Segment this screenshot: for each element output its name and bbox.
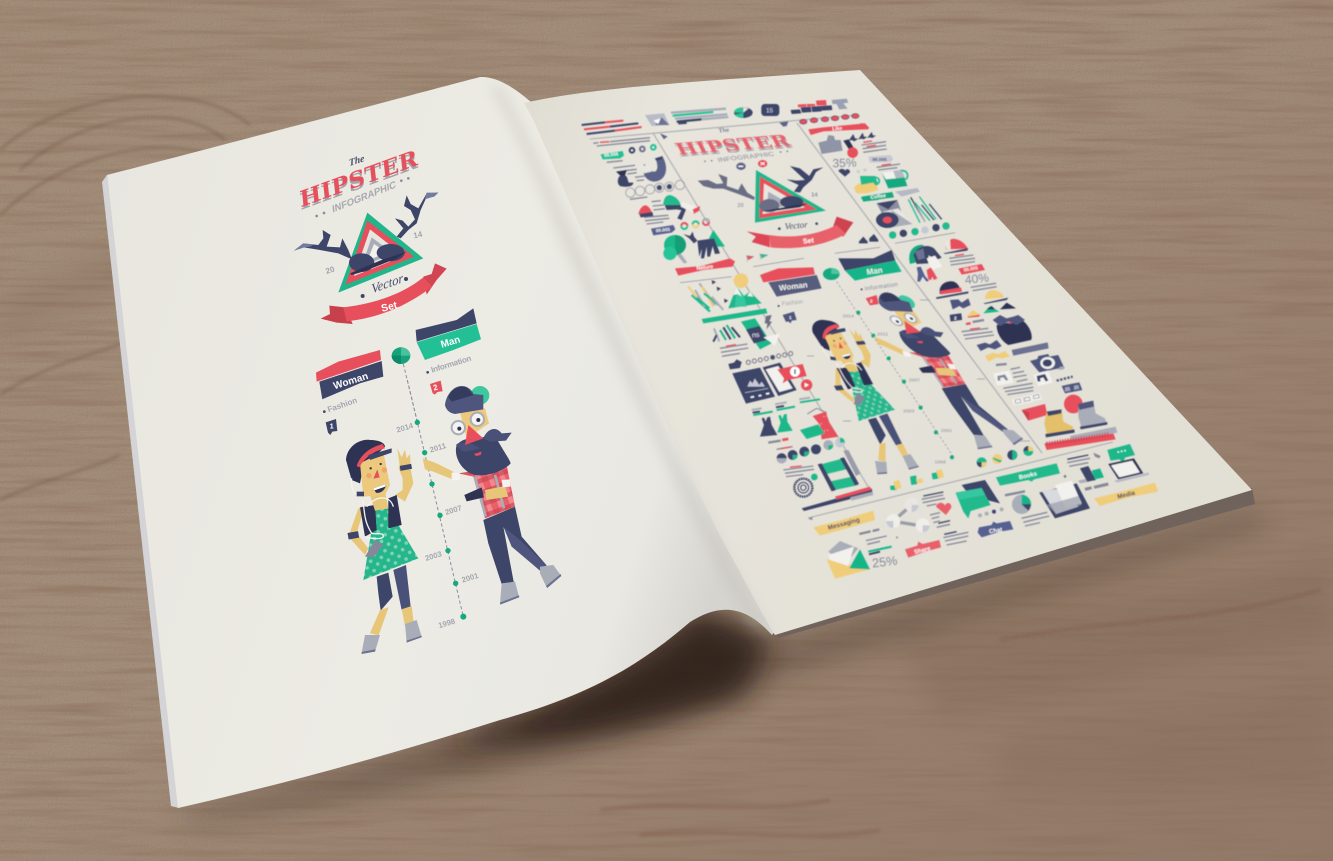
tag: 1 (right page): 1 bbox=[789, 315, 792, 320]
banner: Nature bbox=[675, 258, 735, 276]
tag: 2 (right page): 2 bbox=[870, 298, 873, 303]
pies row bbox=[777, 438, 845, 463]
icon: triangle badge bbox=[338, 213, 423, 293]
icon: antlers bbox=[294, 193, 438, 259]
lines and bar bbox=[859, 529, 892, 554]
label: Fashion: Fashion bbox=[326, 396, 358, 414]
section: right column top bbox=[860, 123, 975, 299]
tag: 2 (right page) bbox=[866, 295, 879, 305]
plus sign: + bbox=[1063, 474, 1067, 480]
figure: woman (right page) bbox=[807, 318, 923, 479]
icon: red box and disc bbox=[1022, 395, 1083, 421]
stat: 35%: 35% bbox=[832, 155, 857, 170]
timeline balloon bbox=[392, 347, 410, 364]
strip: comb bars bbox=[1012, 342, 1049, 356]
icon: red bubble clock bbox=[777, 364, 807, 383]
icon: sun bbox=[734, 273, 748, 288]
right page sheet bbox=[524, 70, 1252, 635]
title: HIPSTER: HIPSTER bbox=[298, 147, 420, 216]
arrow lines above labels bbox=[753, 247, 880, 267]
multicolor rings bbox=[681, 219, 709, 229]
icons: people bbox=[859, 234, 878, 243]
icon: triangle badge (right page) bbox=[755, 170, 826, 223]
icon: thermometer bbox=[843, 139, 858, 158]
banner: Share bbox=[905, 540, 941, 558]
years 20 and 14 (right page): 20 bbox=[737, 203, 744, 209]
icon: cursor arrow bbox=[660, 133, 668, 139]
icon: navy shirt with bow tie bbox=[993, 315, 1032, 345]
icons: man and woman bbox=[917, 267, 937, 282]
section: bottom media row bbox=[794, 444, 1158, 579]
section: right column bottom bbox=[950, 264, 1117, 467]
icon: magnets bbox=[607, 156, 666, 187]
gutter shading bbox=[490, 85, 772, 632]
grid divider lines bbox=[590, 115, 1113, 518]
subtitle: INFOGRAPHIC (right page) bbox=[704, 150, 788, 164]
green banner fragment bbox=[861, 195, 878, 201]
panel: right page infographic bbox=[582, 99, 1158, 579]
paragraph lines bbox=[593, 138, 650, 146]
title: HIPSTER (right page) bbox=[672, 132, 796, 161]
stars row bbox=[849, 132, 876, 141]
lines bbox=[720, 344, 748, 356]
section: top row and left column bbox=[582, 99, 880, 283]
plus mark: × bbox=[896, 535, 899, 540]
stars bbox=[778, 222, 818, 230]
bottom line arrowhead bbox=[808, 517, 812, 520]
banner: Share: Share bbox=[914, 546, 932, 556]
badge: 15: 15 bbox=[766, 108, 773, 115]
banner: Chat bbox=[978, 521, 1013, 537]
bar lines top left bbox=[582, 121, 642, 134]
years 20 and 14 (right page): 14 bbox=[811, 192, 818, 198]
title: The: The bbox=[348, 153, 366, 169]
icon: navy dress bbox=[760, 417, 777, 437]
banner: Man: Man bbox=[440, 335, 462, 351]
icon: trees and deer bbox=[663, 230, 725, 263]
lines bbox=[943, 532, 968, 545]
badge: 00.005 red bbox=[958, 264, 985, 275]
cup steam and yellow snack bbox=[854, 168, 878, 193]
title: HIPSTER (right page): HIPSTER bbox=[673, 134, 796, 161]
timeline: years 1998 to 2014: 1998 bbox=[437, 616, 457, 630]
icon: ladder bbox=[818, 450, 861, 491]
banner: Messaging: Messaging bbox=[827, 517, 861, 532]
white tile icons bbox=[993, 371, 1053, 405]
banner: Media: Media bbox=[1117, 490, 1136, 501]
lines bbox=[1067, 455, 1090, 466]
icon: smart watch bbox=[741, 318, 772, 349]
badge: 00.005 green: 00.005 bbox=[604, 151, 619, 158]
subtitle: INFOGRAPHIC bbox=[315, 177, 410, 217]
stars bbox=[361, 277, 408, 298]
chart: small green bars bbox=[713, 325, 740, 342]
label: Information: Information bbox=[430, 354, 473, 375]
icon: navy heart bbox=[838, 169, 850, 177]
icon: share nodes bbox=[886, 498, 930, 532]
lines bbox=[777, 447, 793, 449]
left page edge stack bbox=[102, 175, 179, 808]
icon: green dress bbox=[777, 414, 793, 433]
icon: yellow pastry bbox=[860, 183, 878, 193]
banner: Coffee: Coffee bbox=[870, 193, 887, 201]
grey tag bbox=[895, 188, 920, 197]
lines bbox=[949, 254, 975, 265]
icon: envelope bbox=[877, 200, 902, 216]
ring row bbox=[626, 180, 685, 197]
icon: smart watch: ΠS bbox=[752, 333, 760, 340]
banner: Nature: Nature bbox=[696, 264, 714, 272]
ribbon: Set (right page): Set bbox=[803, 237, 815, 246]
ribbon: Set (right page) bbox=[747, 217, 853, 248]
timeline (right page): 1998 bbox=[935, 459, 946, 465]
magazine shadow on table bbox=[176, 510, 1265, 822]
icon: lightning bbox=[765, 315, 772, 329]
banner: Coffee bbox=[862, 192, 894, 202]
icon: yellow boot bbox=[1044, 409, 1075, 437]
small paired bars bbox=[890, 469, 944, 490]
small triangles bbox=[712, 280, 728, 303]
red dot row bbox=[800, 114, 859, 124]
timeline (right page) bbox=[837, 282, 954, 465]
lines bbox=[1022, 512, 1049, 526]
column bars bbox=[1078, 466, 1104, 483]
strips: corrugated bbox=[1044, 427, 1117, 450]
icon: green box bbox=[800, 424, 825, 439]
timeline (right page): 2014 bbox=[843, 313, 854, 319]
icon: coat bbox=[909, 245, 943, 270]
figure: woman bbox=[346, 440, 422, 654]
banner: Media bbox=[1094, 483, 1158, 506]
ribbon: Set bbox=[321, 263, 447, 324]
timeline: years 1998 to 2014: 2003 bbox=[424, 549, 443, 563]
chevrons and navy tiles bbox=[1057, 377, 1082, 393]
timeline: years 1998 to 2014: 2001 bbox=[461, 571, 480, 585]
icon: antlers (right page) bbox=[698, 166, 823, 200]
icon: envelope bbox=[827, 541, 870, 579]
paragraph lines bbox=[862, 141, 887, 152]
timeline (right page): 2001 bbox=[941, 428, 952, 434]
years 20 and 14 bbox=[324, 230, 424, 276]
panel: left page header emblem bbox=[294, 145, 481, 422]
icon: navy bow tie bbox=[950, 298, 971, 309]
stat: 25%: 25% bbox=[871, 554, 898, 571]
green dot bbox=[811, 474, 818, 480]
timeline (right page): 2011 bbox=[877, 332, 888, 338]
strip: green wave bbox=[702, 308, 767, 323]
years 20 and 14: 14 bbox=[413, 230, 424, 240]
dots row bbox=[978, 507, 1004, 517]
badge: 00.005 grey bbox=[868, 155, 893, 163]
wifi icon bbox=[1093, 453, 1101, 458]
icon: heart bbox=[936, 503, 951, 515]
lines bbox=[1003, 367, 1033, 395]
banner: Like: Like bbox=[832, 126, 843, 132]
title: The (right page): The bbox=[717, 127, 731, 134]
icon: folded tile bbox=[645, 113, 669, 126]
banner: Messaging bbox=[813, 511, 875, 536]
label: Information (right page): Information bbox=[864, 282, 898, 293]
figure: man bbox=[423, 386, 561, 605]
subtitle: INFOGRAPHIC (right page): INFOGRAPHIC bbox=[717, 151, 776, 164]
magazine bottom page block edge bbox=[770, 488, 1255, 638]
grey dash bbox=[996, 360, 1007, 368]
badge: 00.005 grey: 00.005 bbox=[872, 157, 887, 162]
tag: 1: 1 bbox=[330, 422, 334, 431]
icon: laptop bbox=[1108, 458, 1149, 483]
banner: Like bbox=[808, 123, 869, 135]
icon: chat bubbles bbox=[956, 480, 1000, 518]
left page sheet bbox=[107, 77, 800, 808]
icon: yellow hat bbox=[983, 290, 1008, 304]
label bars bbox=[966, 320, 971, 327]
icon: navy hat small bbox=[728, 359, 742, 369]
badge: 00.005 green bbox=[601, 151, 624, 159]
timeline (right page): 2003 bbox=[903, 409, 915, 415]
timeline: years 1998 to 2014: 2014 bbox=[395, 421, 415, 435]
banner: Books bbox=[996, 463, 1060, 486]
icon: wheel bbox=[794, 479, 812, 497]
panel: left page characters and timeline bbox=[326, 380, 561, 654]
chart: slanted bars bbox=[688, 283, 723, 312]
tag: 2 bbox=[430, 381, 443, 395]
badge: 00.005 navy: 00.005 bbox=[656, 227, 671, 233]
figure: man (right page) bbox=[855, 287, 1031, 459]
lines bbox=[783, 466, 814, 477]
icon: coffee cups bbox=[860, 170, 908, 188]
icon: open book bbox=[1039, 481, 1090, 518]
grey bars bbox=[1085, 484, 1108, 489]
ribbon: Set: Set bbox=[380, 300, 399, 315]
icon: red hat bbox=[943, 239, 968, 254]
man banner (right page) bbox=[838, 250, 902, 281]
small bar groups bbox=[752, 398, 820, 415]
stat: 40%: 40% bbox=[964, 271, 990, 287]
icon: thumbs up bbox=[818, 135, 843, 154]
banner: Man bbox=[416, 308, 481, 360]
lines bbox=[971, 283, 997, 291]
row of small discs bbox=[889, 222, 950, 239]
man banner (right page): Man bbox=[866, 266, 883, 277]
icon: music player tablet bbox=[732, 368, 775, 404]
ring row bbox=[746, 352, 793, 364]
banner: Books: Books bbox=[1018, 471, 1038, 481]
timeline: years 1998 to 2014: 2007 bbox=[444, 503, 463, 517]
lines bbox=[877, 164, 900, 170]
red icon bbox=[860, 123, 869, 129]
stacked bar chart top bbox=[671, 109, 728, 123]
timeline: years 1998 to 2014: 2011 bbox=[429, 441, 448, 455]
column chart with red caps bbox=[791, 100, 832, 114]
section: left column middle bbox=[688, 250, 1031, 479]
stacked strips bbox=[802, 487, 873, 511]
text: Vector: Vector bbox=[371, 270, 405, 296]
icon: red polka dress on hanger bbox=[807, 408, 838, 439]
tag: 2: 2 bbox=[954, 315, 957, 321]
icons: bow ties bbox=[977, 340, 1002, 351]
icon: grey hammer bbox=[832, 99, 848, 109]
slanted bar chart bbox=[908, 197, 942, 223]
banner: Woman: Woman bbox=[332, 371, 370, 392]
three ring icons bbox=[630, 145, 656, 153]
banner: Chat: Chat bbox=[989, 527, 1003, 535]
badge: 00.005 navy bbox=[651, 225, 675, 235]
icon: mountains bbox=[728, 287, 762, 308]
timeline (right page): 2007 bbox=[909, 377, 920, 383]
icon: green hat and bell bbox=[630, 195, 700, 224]
icon: vinyl record bbox=[876, 208, 913, 228]
icon: camera bbox=[1030, 354, 1065, 372]
title: HIPSTER: HIPSTER bbox=[298, 145, 420, 213]
icon: navy hat bbox=[936, 281, 968, 299]
title: HIPSTER (right page): HIPSTER bbox=[672, 132, 795, 159]
woman banner (right page): Woman bbox=[779, 280, 808, 293]
timeline: years 1998 to 2014 bbox=[395, 380, 480, 630]
small hats bbox=[967, 303, 1016, 318]
tag: 2 bbox=[950, 313, 962, 321]
badge: 15 bbox=[761, 104, 779, 116]
icon: twitter bird bbox=[779, 121, 788, 127]
icon: phone bbox=[763, 363, 797, 396]
balloon (right page) bbox=[823, 268, 840, 280]
badge: 00.005 red: 00.005 bbox=[963, 265, 979, 273]
icon: green bubble bbox=[1107, 444, 1135, 463]
woman banner (right page) bbox=[760, 267, 822, 297]
tag: 1 (right page) bbox=[783, 312, 797, 323]
years 20 and 14 (right page) bbox=[737, 192, 818, 209]
text: Vector (right page): Vector bbox=[784, 219, 809, 231]
icon: pie chart bbox=[1005, 491, 1031, 514]
icon: play button bbox=[801, 379, 812, 391]
icon: paper plane bbox=[763, 333, 780, 346]
pies row bottom bbox=[977, 446, 1033, 467]
tag: 1 bbox=[326, 419, 337, 435]
subtitle: INFOGRAPHIC: INFOGRAPHIC bbox=[332, 179, 397, 216]
banner: Woman bbox=[316, 350, 383, 399]
years 20 and 14: 20 bbox=[324, 264, 336, 276]
icons: navy and red discs bbox=[736, 160, 767, 170]
lines bbox=[922, 492, 950, 527]
icon: pie bbox=[734, 107, 753, 118]
icons: flags bbox=[747, 254, 768, 262]
tag: 2: 2 bbox=[432, 383, 439, 393]
label: Fashion (right page): Fashion bbox=[782, 299, 803, 308]
lines bbox=[962, 328, 994, 339]
icon: grey boot bbox=[1078, 401, 1107, 429]
grey and red labels bbox=[768, 439, 788, 443]
